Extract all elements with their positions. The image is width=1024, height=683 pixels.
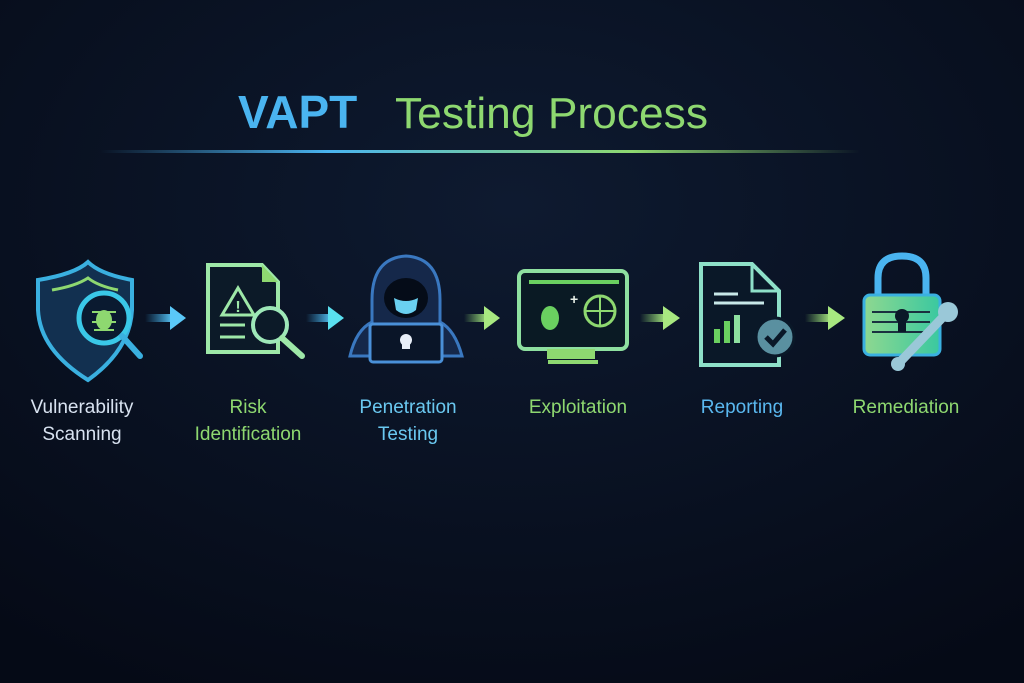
label: penetration testing: Penetration [359,397,457,418]
icon: risk document: ! [235,299,241,316]
icon: report document [701,264,794,365]
arrow 4 [640,306,680,330]
icon: shield with magnifier [38,262,140,380]
arrow 2 [306,306,344,330]
icon: risk document [208,265,302,356]
arrow 1 [145,306,186,330]
label: vulnerability scanning: Vulnerability [31,397,134,418]
title: VAPT [238,86,357,138]
label: penetration testing [359,397,457,445]
title: Testing Process [395,89,708,138]
icon: monitor exploitation: + [570,291,578,307]
label: penetration testing: Testing [378,424,438,445]
label: remediation: Remediation [853,397,959,418]
label: exploitation: Exploitation [529,397,627,418]
arrow 3 [464,306,500,330]
label: risk identification [195,397,301,445]
label: reporting: Reporting [701,397,783,418]
label: risk identification: Identification [195,424,301,445]
arrow 5 [805,306,845,330]
label: vulnerability scanning: Scanning [42,424,122,445]
label: risk identification: Risk [230,397,267,418]
icon: monitor exploitation [519,271,627,364]
icon: hacker with laptop [350,256,462,362]
title [238,86,708,138]
label: vulnerability scanning [31,397,134,445]
icon: lock with wrench [864,256,958,371]
